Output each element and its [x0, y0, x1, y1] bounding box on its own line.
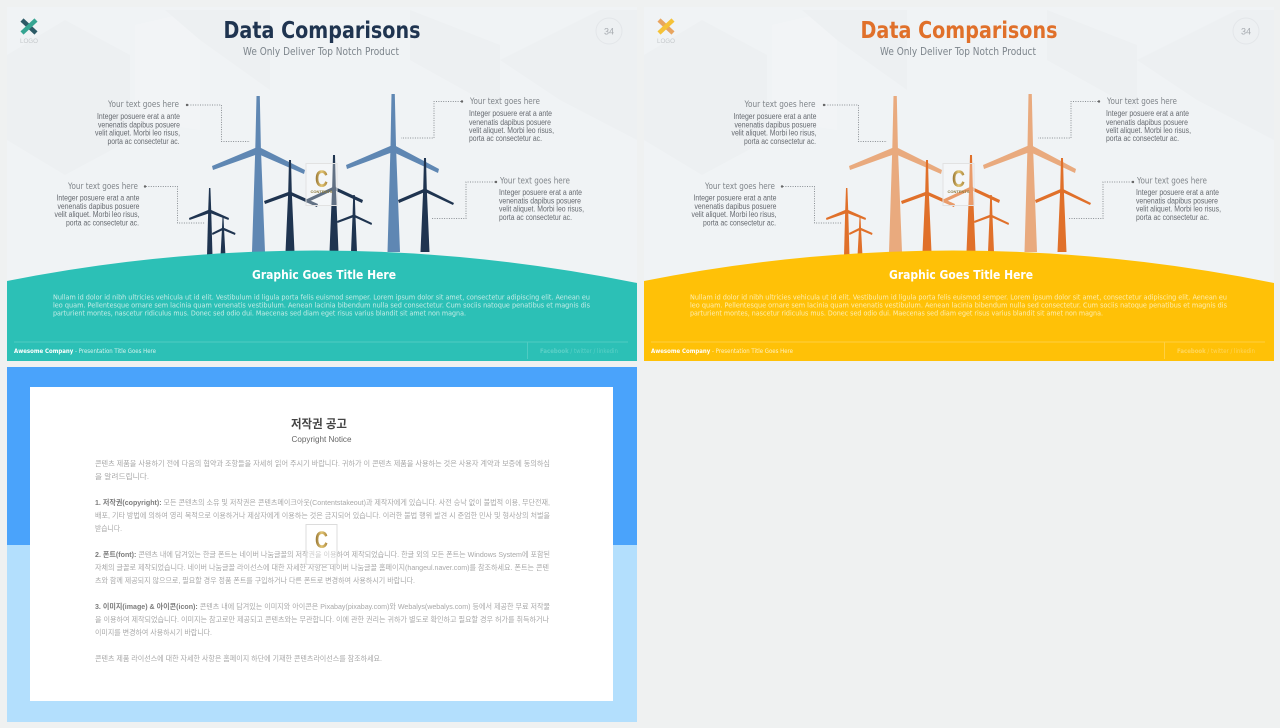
callout: lower right: [1068, 176, 1221, 222]
watermark badge: CONTENTS: [310, 189, 333, 194]
watermark badge: [943, 164, 974, 206]
callout: top left: porta ac consectetur ac.: [108, 137, 180, 146]
notice body: 츠와 함께 제공되지 않으므로, 필요할 경우 정품 폰트를 구입하거나 다른 폰트로 변경하여 사용하시기 바랍니다.: [95, 576, 415, 585]
callout: top left: [732, 100, 887, 146]
notice subtitle: Copyright Notice: [292, 434, 352, 444]
callout: top right: venenatis dapibus posuere: [469, 118, 551, 127]
callout: lower right: venenatis dapibus posuere: [1136, 196, 1218, 206]
watermark badge: [306, 164, 337, 206]
band text: Nullam id dolor id nibh ultricies vehicula ut id elit. Vestibulum id ligula porta felis euismod semper. Lorem ipsum dolor sit amet, consectetur adipiscing elit. Aenean eu: [690, 294, 1227, 302]
notice body: 콘텐츠 제품을 사용하기 전에 다음의 협약과 조항들을 자세히 읽어 주시기 바랍니다. 귀하가 이 콘텐츠 제품을 사용하는 것은 사용자 계약과 보증에 동의하심: [95, 459, 550, 468]
callout: top left: venenatis dapibus posuere: [734, 120, 817, 130]
notice body: 을 알려드립니다.: [95, 472, 149, 481]
watermark badge: CONTENTS: [948, 189, 970, 194]
callout: lower left: venenatis dapibus posuere: [694, 202, 777, 211]
band text: Nullam id dolor id nibh ultricies vehicula ut id elit. Vestibulum id ligula porta felis euismod semper. Lorem ipsum dolor sit amet, consectetur adipiscing elit. Aenean eu: [53, 294, 590, 302]
logo: LOGO: [657, 39, 675, 45]
notice body: 콘텐츠 제품 라이선스에 대한 자세한 사항은 홈페이지 하단에 기재한 콘텐츠라이선스를 참조하세요.: [95, 654, 382, 663]
callout: top right: velit aliquet. Morbi leo risus,: [469, 126, 554, 135]
callout: top left: Integer posuere erat a ante: [734, 112, 817, 121]
callout: top right: porta ac consectetur ac.: [469, 134, 542, 143]
band text: leo quam. Pellentesque ornare sem lacinia quam venenatis vestibulum. Aenean lacinia bibendum nulla sed consectetur. Cum sociis natoque penatibus et magnis dis: [690, 302, 1227, 310]
callout: lower right: porta ac consectetur ac.: [1136, 213, 1209, 222]
notice body: [95, 459, 550, 663]
watermark badge: [306, 524, 337, 564]
callout: top right: Integer posuere erat a ante: [469, 109, 552, 118]
panel: copyright notice: [7, 367, 637, 722]
page number badge: [1233, 18, 1259, 44]
logo: LOGO: [20, 39, 38, 45]
callout: lower right: Your text goes here: [499, 176, 570, 186]
page number badge: 34: [1241, 26, 1251, 36]
callout: top right: venenatis dapibus posuere: [1106, 118, 1188, 127]
notice body: 자체의 글꼴로 제작되었습니다. 네이버 나눔글꼴 라이선스에 대한 자세한 사항은 네이버 나눔글꼴 홈페이지(hangeul.naver.com)를 참조하세요. 폰트는 콘텐: [95, 563, 549, 572]
wind turbines: [826, 94, 1091, 256]
callout: lower left: porta ac consectetur ac.: [66, 218, 139, 228]
callout: top left: Your text goes here: [107, 100, 179, 110]
callout: lower right: velit aliquet. Morbi leo risus,: [1136, 204, 1221, 214]
footer: [651, 342, 1265, 359]
notice body: 2. 폰트(font): 콘텐츠 내에 담겨있는 한글 폰트는 네이버 나눔글꼴의 저작권을 이용하여 제작되었습니다. 한글 외의 모든 폰트는 Windows System에 포함된: [95, 550, 550, 559]
title: Data Comparisons: [860, 18, 1058, 44]
subtitle: We Only Deliver Top Notch Product: [243, 46, 399, 58]
band heading: Graphic Goes Title Here: [252, 267, 396, 282]
callout: lower left: venenatis dapibus posuere: [58, 202, 140, 211]
band heading: Graphic Goes Title Here: [889, 267, 1033, 282]
callout: top left: Integer posuere erat a ante: [97, 112, 180, 121]
callout: lower right: [431, 176, 584, 222]
band text: [53, 294, 590, 318]
band text: leo quam. Pellentesque ornare sem lacinia quam venenatis vestibulum. Aenean lacinia bibendum nulla sed consectetur. Cum sociis natoque penatibus et magnis dis: [53, 302, 590, 310]
callout: lower left: porta ac consectetur ac.: [703, 218, 776, 228]
callout: lower right: velit aliquet. Morbi leo risus,: [499, 204, 584, 214]
footer: Facebook / twitter / linkedin: [540, 348, 618, 355]
callout: lower left: Your text goes here: [704, 182, 775, 192]
footer: Awesome Company - Presentation Title Goes Here: [651, 348, 793, 355]
callout: top left: porta ac consectetur ac.: [744, 137, 816, 146]
callout: lower right: venenatis dapibus posuere: [499, 196, 581, 206]
callout: top right: velit aliquet. Morbi leo risus,: [1106, 126, 1191, 135]
notice title: 저작권 공고: [291, 416, 347, 431]
band text: parturient montes, nascetur ridiculus mus. Donec sed odio dui. Maecenas sed diam eget risus varius blandit sit amet non magna.: [690, 310, 1103, 318]
page number badge: 34: [604, 26, 614, 36]
band text: [690, 294, 1227, 318]
callout: top right: [401, 97, 554, 143]
callout: top left: velit aliquet. Morbi leo risus,: [732, 128, 816, 138]
watermark badge: C: [315, 166, 328, 193]
footer: Facebook / twitter / linkedin: [1177, 348, 1255, 355]
watermark badge: C: [952, 166, 965, 193]
yellow ground band: [644, 250, 1274, 361]
panel: orange slide: [644, 7, 1274, 361]
callout: top left: [95, 100, 250, 146]
subtitle: We Only Deliver Top Notch Product: [880, 46, 1036, 58]
band text: parturient montes, nascetur ridiculus mus. Donec sed odio dui. Maecenas sed diam eget risus varius blandit sit amet non magna.: [53, 310, 466, 318]
callout: lower left: Integer posuere erat a ante: [56, 194, 140, 202]
callout: lower left: [54, 182, 205, 228]
callout: top left: venenatis dapibus posuere: [98, 120, 180, 130]
notice body: 3. 이미지(image) & 아이콘(icon): 콘텐츠 내에 담겨있는 이미지와 아이콘은 Pixabay(pixabay.com)와 Webalys(webalys.com) 등에서 제공한 무료 저작물: [95, 602, 550, 611]
callout: lower left: Integer posuere erat a ante: [694, 194, 777, 202]
callout: lower left: velit aliquet. Morbi leo risus,: [692, 210, 776, 219]
callout: top right: Your text goes here: [1106, 97, 1177, 107]
footer: Awesome Company - Presentation Title Goes Here: [14, 348, 156, 355]
callout: top right: [1038, 97, 1191, 143]
watermark badge: C: [315, 527, 328, 554]
callout: lower left: [692, 182, 842, 228]
logo: [657, 20, 675, 45]
notice body: 배포, 기타 방법에 의하여 영리 목적으로 이용하거나 제삼자에게 이용하는 것은 금지되어 있습니다. 이러한 불법 행위 발견 시 준엄한 민사 및 형사상의 처벌을: [95, 511, 550, 520]
notice body: 을 이용하여 제작되었습니다. 이미지는 참고로만 제공되고 콘텐츠와는 무관합니다. 이에 관한 권리는 귀하가 별도로 확인하고 필요할 경우 허가를 취득하거나: [95, 615, 549, 624]
wind turbines: [189, 94, 454, 256]
callout: lower right: Integer posuere erat a ante: [1136, 188, 1219, 197]
logo: [20, 20, 38, 45]
callout: lower right: Integer posuere erat a ante: [499, 188, 582, 197]
callout: top right: porta ac consectetur ac.: [1106, 134, 1179, 143]
callout: lower left: Your text goes here: [67, 182, 138, 192]
panel: teal slide: [7, 7, 637, 361]
footer: [14, 342, 628, 359]
page number badge: [596, 18, 622, 44]
callout: lower left: velit aliquet. Morbi leo risus,: [54, 210, 140, 219]
callout: lower right: Your text goes here: [1136, 176, 1207, 186]
callout: lower right: porta ac consectetur ac.: [499, 213, 572, 222]
teal ground band: [7, 250, 637, 361]
callout: top right: Integer posuere erat a ante: [1106, 109, 1189, 118]
notice body: 이미지를 변경하여 사용하시기 바랍니다.: [95, 628, 212, 637]
callout: top left: Your text goes here: [744, 100, 816, 110]
callout: top right: Your text goes here: [469, 97, 540, 107]
title: Data Comparisons: [224, 18, 420, 44]
notice body: 받습니다.: [95, 524, 122, 533]
callout: top left: velit aliquet. Morbi leo risus,: [95, 128, 180, 138]
notice body: 1. 저작권(copyright): 모든 콘텐츠의 소유 및 저작권은 콘텐츠메이크아웃(Contentstakeout)과 제작자에게 있습니다. 사전 승낙 없이 불법적 이용, 무단전재,: [95, 498, 550, 507]
